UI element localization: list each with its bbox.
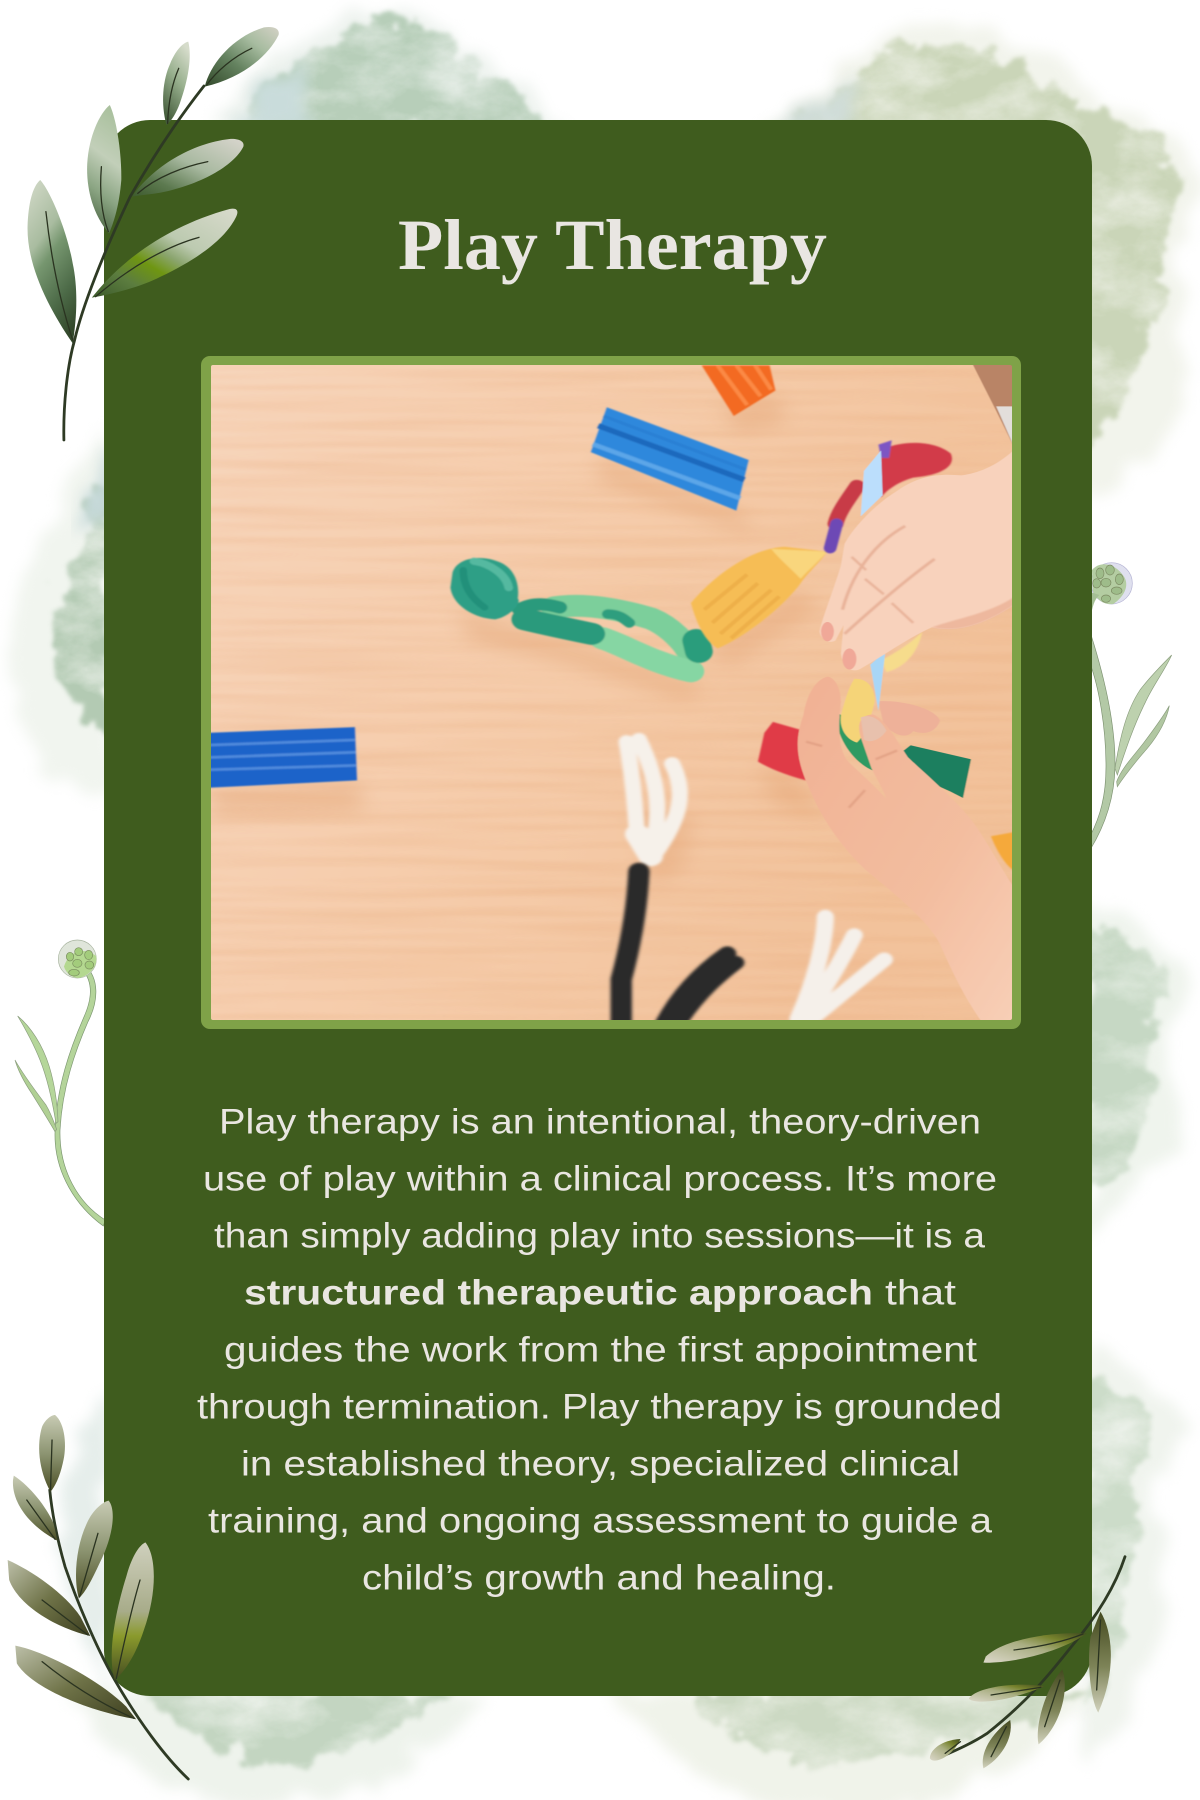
wash: right lower bbox=[1085, 1350, 1185, 1760]
leaf ribs bbox=[945, 1620, 1101, 1757]
leaf: far left bbox=[28, 180, 76, 343]
tool: lower blade tip bbox=[870, 651, 885, 711]
flower leaf upper bbox=[18, 1016, 58, 1123]
flower leaf lower bbox=[1117, 706, 1169, 787]
clay: dark green bar bbox=[903, 745, 972, 798]
flower leaf lower bbox=[15, 1060, 57, 1132]
clay: blue bar bbox=[591, 407, 749, 511]
leaf branch: bottom right bbox=[930, 1557, 1125, 1768]
fingers behind the clay bbox=[878, 701, 940, 736]
leaf ribs bbox=[46, 48, 252, 340]
flower leaf upper bbox=[1115, 655, 1172, 775]
plant: right flower behind the card bbox=[1089, 563, 1172, 850]
leaf branch: top left bbox=[28, 27, 279, 440]
clay: blue bar left bbox=[206, 727, 357, 788]
title: Play Therapy bbox=[398, 205, 827, 285]
leaf: large right bbox=[112, 1542, 154, 1680]
leaf branch: bottom left bbox=[8, 1415, 188, 1779]
flower stem bbox=[1090, 632, 1115, 850]
soft shadows bbox=[211, 394, 822, 887]
tool: light blue blade bbox=[861, 450, 883, 516]
leaf: second bbox=[87, 105, 121, 233]
leaf: middle left bbox=[8, 1560, 90, 1636]
hand: lower bbox=[798, 677, 1015, 1023]
wash: left middle bbox=[7, 430, 110, 800]
table surface bbox=[206, 363, 1015, 1023]
leaf: large lower right bbox=[92, 209, 237, 298]
leaf: large lower left bbox=[15, 1646, 136, 1719]
leaf: top bbox=[39, 1415, 65, 1492]
hand: upper bbox=[819, 449, 1015, 670]
wash: bottom left bbox=[70, 1690, 490, 1800]
leaf: upper left bbox=[983, 1633, 1087, 1663]
clay: pale yellow piece bbox=[841, 679, 875, 743]
body text: guides the work from the first appointment bbox=[224, 1330, 977, 1370]
clay: white figure bbox=[627, 739, 680, 856]
leaf: top right bbox=[205, 27, 279, 87]
wash: bottom right bbox=[610, 1690, 1100, 1800]
body text: structured therapeutic approach bbox=[244, 1274, 873, 1312]
leaf: bottom middle bbox=[983, 1720, 1011, 1768]
body text: Play therapy is an intentional, theory-driven bbox=[219, 1102, 981, 1142]
body text: child’s growth and healing. bbox=[362, 1558, 836, 1598]
leaf: tall middle bbox=[1038, 1669, 1065, 1744]
body text bbox=[197, 1102, 1002, 1598]
panel: main green card bbox=[104, 120, 1092, 1696]
clay: red bar bbox=[758, 722, 806, 780]
body text: training, and ongoing assessment to guide a bbox=[208, 1502, 993, 1540]
clay: orange bar bbox=[702, 365, 776, 416]
leaf ribs bbox=[27, 1440, 140, 1718]
leaf: upper right bbox=[76, 1501, 113, 1598]
wash: right middle bbox=[1085, 905, 1190, 1240]
clay: yellow piece bbox=[691, 547, 827, 648]
leaf: top small bbox=[163, 42, 190, 125]
leaf: upper left bbox=[13, 1476, 57, 1541]
photo: child's hands shaping modelling clay on a wooden table bbox=[206, 363, 1015, 1023]
body text: than simply adding play into sessions—it is a bbox=[214, 1216, 986, 1256]
clay: white piece at bottom bbox=[798, 917, 884, 1019]
flower bud bbox=[1091, 563, 1132, 604]
leaf: tall right bbox=[1089, 1612, 1111, 1713]
photo frame bbox=[201, 356, 1021, 1029]
wash: top right bbox=[760, 25, 1198, 500]
clay: red and purple piece bbox=[830, 440, 952, 548]
clay: yellow behind hand bbox=[881, 632, 922, 672]
body text: in established theory, specialized clinical bbox=[241, 1444, 960, 1484]
leaf: middle left bbox=[969, 1685, 1045, 1702]
background beyond table edge bbox=[972, 365, 1012, 444]
body text: that bbox=[885, 1274, 956, 1312]
flower bud bbox=[58, 940, 96, 978]
flower stem bbox=[55, 965, 105, 1226]
body text: through termination. Play therapy is grounded bbox=[197, 1388, 1002, 1426]
clay: orange at edge bbox=[990, 832, 1012, 870]
wash: top left bbox=[215, 11, 560, 140]
leaf: bottom left bbox=[930, 1739, 960, 1761]
wash: left lower bbox=[57, 1390, 110, 1690]
clay: green figure bbox=[450, 558, 699, 671]
clay: green in palm bbox=[838, 714, 873, 770]
clay: black figure bbox=[621, 872, 736, 1023]
body text: use of play within a clinical process. It’s more bbox=[203, 1160, 997, 1198]
plant: left flower behind the card bbox=[15, 940, 105, 1226]
leaf: middle right bbox=[132, 139, 244, 197]
